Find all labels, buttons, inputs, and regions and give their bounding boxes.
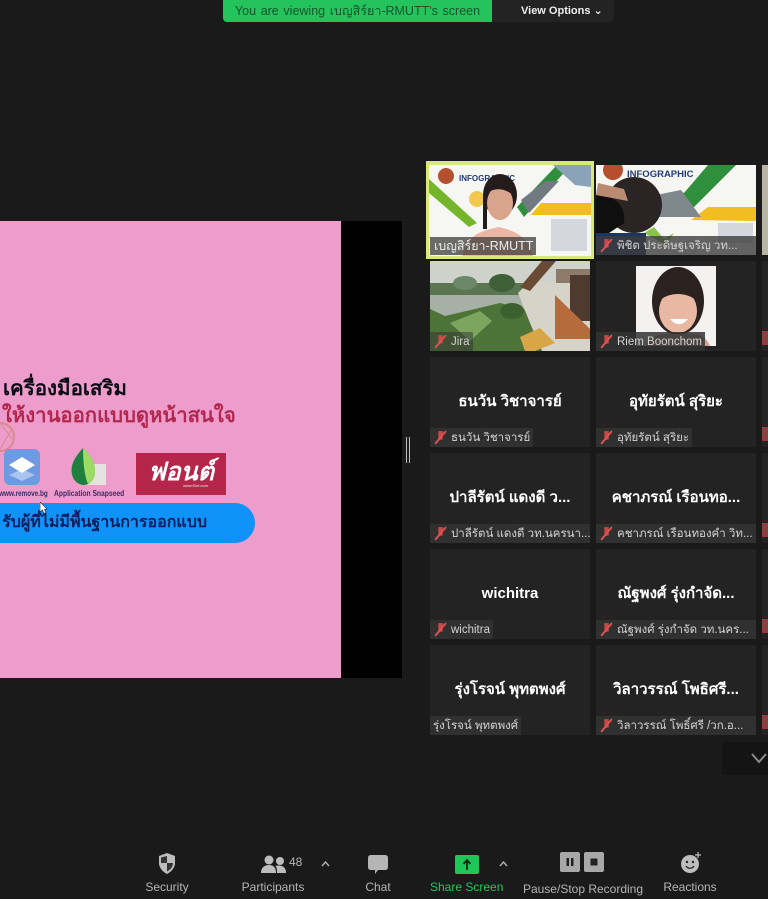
tile: third column top [762, 165, 768, 255]
screen viewing banner [223, 0, 614, 22]
video feed: INFOGRAPHIC [627, 169, 694, 180]
tile: Riem Boonchom [596, 261, 756, 351]
reactions button: Reactions [663, 880, 717, 894]
icon: shield [159, 853, 175, 874]
icon: people [261, 856, 286, 873]
logo: font site: ฟอนต์ [148, 458, 214, 486]
banner label: You are viewing เบญสิร์ยา-RMUTT's screen [235, 4, 480, 18]
tile: wichitra: wichitra [482, 585, 538, 602]
icon: share arrow [455, 855, 479, 874]
tile: presenter [426, 161, 594, 259]
tile: อุทัยรัตน์ สุริยะ: อุทัยรัตน์ สุริยะ [629, 393, 723, 410]
tile: ธนวัน วิชาจารย์: ธนวัน วิชาจารย์ [451, 432, 530, 444]
chat button: Chat [365, 880, 391, 894]
tile: รุ่งโรจน์ พุทตพงศ์: รุ่งโรจน์ พุทตพงศ์ [433, 720, 518, 732]
name label [596, 332, 705, 351]
banner label [223, 0, 492, 22]
tile: อุทัยรัตน์ สุริยะ: อุทัยรัตน์ สุริยะ [617, 432, 689, 444]
panel: shared slide [0, 221, 402, 678]
tile: วิลาวรรณ์ โพธิ์ศรี [596, 645, 756, 735]
gallery scroll down button [722, 742, 768, 775]
tile: ธนวัน วิชาจารย์: ธนวัน วิชาจารย์ [458, 393, 562, 410]
share caret [500, 861, 508, 866]
tile: wichitra [430, 549, 590, 639]
panel divider handle [406, 437, 410, 463]
tile: วิลาวรรณ์ โพธิ์ศรี: วิลาวรรณ์ โพธิศรี... [613, 681, 739, 698]
tile: วิลาวรรณ์ โพธิ์ศรี: วิลาวรรณ์ โพธิ์ศรี /วก.อ... [617, 720, 743, 732]
participants button: Participants [242, 880, 304, 894]
tile: รุ่งโรจน์ พุทตพงศ์ [430, 645, 590, 735]
participants button: 48 [289, 855, 302, 869]
tile: ปาลีรัตน์ แดงดี: ปาลีรัตน์ แดงดี วท.นครนา... [451, 528, 590, 540]
profile photo [636, 266, 716, 346]
logo: font site [136, 453, 226, 495]
decorative sketch [0, 422, 15, 452]
reactions button [663, 852, 717, 894]
presenter video: INFOGRAPHIC [459, 174, 515, 183]
presenter video [429, 165, 591, 256]
recording button: Pause/Stop Recording [523, 882, 643, 896]
tile: อุทัยรัตน์ สุริยะ [596, 357, 756, 447]
icon: chat bubble [368, 855, 388, 874]
tile: คชาภรณ์ เรือนทอง [596, 453, 756, 543]
tile: ธนวัน วิชาจารย์ [430, 357, 590, 447]
tile: ปาลีรัตน์ แดงดี: ปาลีรัตน์ แดงดี ว... [450, 489, 570, 506]
name label: Riem Boonchom [617, 336, 702, 348]
presenter name label: เบญสิร์ยา-RMUTT [434, 239, 533, 253]
icon: chevron down [751, 754, 767, 764]
video feed [596, 165, 756, 255]
view options button: View Options ⌄ [521, 5, 603, 17]
share screen button: Share Screen [430, 880, 503, 894]
slide heading: เครื่องมือเสริม [3, 377, 127, 400]
name label [596, 236, 756, 255]
tile: ณัฐพงศ์ รุ่งกำจัด: ณัฐพงศ์ รุ่งกำจัด วท.นคร... [617, 624, 749, 636]
name label: Jira [451, 336, 470, 348]
security button: Security [145, 880, 189, 894]
tile: รุ่งโรจน์ พุทตพงศ์: รุ่งโรจน์ พุทตพงศ์ [455, 681, 565, 698]
recording button [523, 852, 643, 896]
tile: Jira [430, 261, 590, 351]
icon: remove.bg [4, 449, 40, 485]
tile: ณัฐพงศ์ รุ่งกำจัด [596, 549, 756, 639]
video feed [430, 261, 590, 351]
name label [430, 332, 473, 351]
security button [145, 853, 189, 894]
tile: คชาภรณ์ เรือนทอง: คชาภรณ์ เรือนทองคำ วิท... [617, 528, 753, 540]
panel: participant gallery [426, 161, 768, 735]
tile: ปาลีรัตน์ แดงดี [430, 453, 590, 543]
icon: pause and stop [560, 852, 604, 872]
chat button [365, 855, 391, 894]
name label: พิชิต ประดิษฐเจริญ วท... [617, 240, 738, 252]
tile: พิชิต [596, 165, 756, 255]
blue pill banner: รับผู้ที่ไม่มีพื้นฐานการออกแบบ [2, 514, 207, 531]
blue pill banner [0, 503, 255, 543]
label: remove.bg: www.remove.bg [0, 489, 48, 498]
meeting toolbar [145, 852, 717, 896]
icon: mouse cursor [40, 502, 47, 514]
share screen button [430, 855, 503, 894]
tile: ณัฐพงศ์ รุ่งกำจัด: ณัฐพงศ์ รุ่งกำจัด... [617, 585, 734, 602]
third column edge tiles [762, 261, 768, 735]
tile: wichitra: wichitra [451, 624, 490, 636]
logo: font site: www.f0nt.com [183, 483, 208, 488]
slide pink background [0, 221, 341, 678]
slide subheading: ให้งานออกแบบดูหน้าสนใจ [2, 405, 236, 427]
icon: smiley [681, 852, 701, 873]
participants button [242, 855, 304, 894]
tile: คชาภรณ์ เรือนทอง: คชาภรณ์ เรือนทอ... [612, 489, 740, 506]
participants caret [322, 861, 330, 866]
label: snapseed: Application Snapseed [54, 489, 124, 498]
icon: snapseed [72, 448, 106, 485]
